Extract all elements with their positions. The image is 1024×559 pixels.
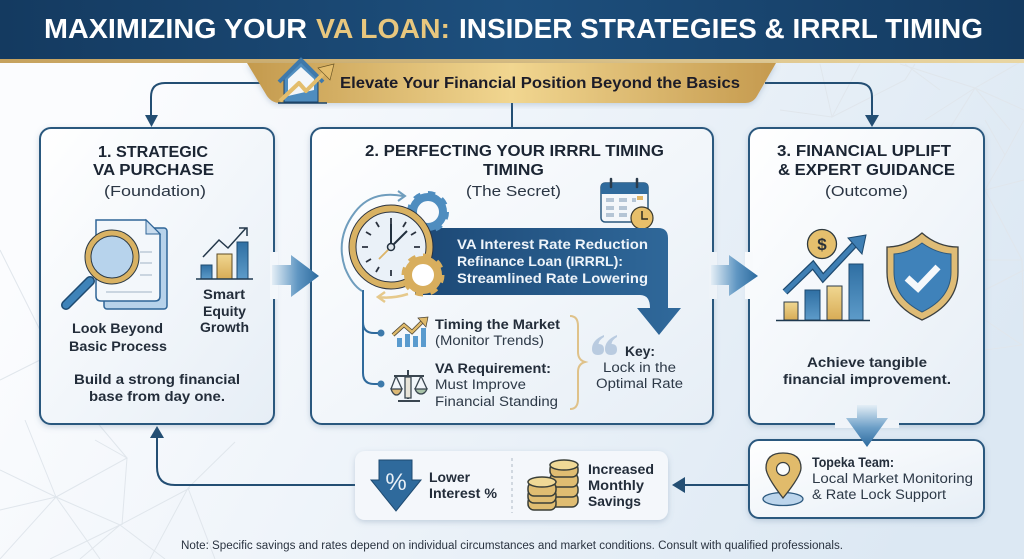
Topeka text: Local Market Monitoring [812, 471, 973, 486]
connector: ribbon to panel 3 [765, 83, 879, 127]
ribbon text: Elevate Your Financial Position Beyond the Basics [340, 75, 740, 92]
icon: quotation marks [592, 335, 617, 355]
panel 1 heading [93, 144, 214, 200]
label: smart equity growth [200, 287, 249, 335]
icon: growth chart with coin: $ [817, 235, 827, 254]
label: look beyond basic process: Look Beyond [72, 321, 163, 336]
panel 1 summary: base from day one. [89, 389, 225, 404]
Topeka text: Topeka Team: [812, 455, 894, 470]
text: monthly savings [588, 462, 654, 509]
text: monthly savings: Increased [588, 462, 654, 477]
icon: clock with gears [342, 191, 446, 302]
label: smart equity growth: Growth [200, 320, 249, 335]
banner arrow: IRRRL definition [415, 228, 681, 335]
icon: coin stacks [528, 460, 578, 510]
title: INSIDER STRATEGIES & IRRRL TIMING [459, 13, 983, 44]
connector: ribbon to panel 2 [511, 100, 513, 128]
arrow: panel 1 to panel 2 [270, 252, 319, 299]
text: VA requirement [435, 361, 558, 409]
text: lower interest [429, 470, 497, 501]
panel 1 heading: (Foundation) [104, 183, 206, 200]
text: lower interest: Interest % [429, 486, 497, 501]
panel 1 heading: VA PURCHASE [93, 162, 214, 179]
text: VA requirement: VA Requirement: [435, 361, 551, 376]
brace [570, 316, 585, 409]
icon: percent down arrow: % [385, 469, 407, 496]
label: look beyond basic process: Basic Process [69, 339, 167, 354]
label: smart equity growth: Equity [203, 304, 246, 319]
panel 1 heading: 1. STRATEGIC [98, 144, 208, 161]
icon: location pin [763, 453, 803, 506]
panel 2 heading: 2. PERFECTING YOUR IRRRL TIMING [365, 143, 664, 160]
title [44, 13, 983, 44]
panel 1 summary [74, 372, 240, 404]
panel 3: financial uplift [749, 128, 984, 424]
header band [0, 0, 1024, 63]
panel 2 heading [365, 143, 664, 200]
text: monthly savings: Monthly [588, 478, 645, 493]
text: VA requirement: Financial Standing [435, 394, 558, 409]
text: key takeaway: Lock in the [603, 360, 676, 375]
text: lower interest: Lower [429, 470, 471, 485]
icon: calendar [601, 179, 653, 229]
title: MAXIMIZING YOUR [44, 13, 307, 44]
panel 2 heading: (The Secret) [466, 183, 561, 200]
text: VA requirement: Must Improve [435, 377, 526, 392]
ribbon subtitle [247, 60, 776, 103]
icon: house with rising arrow [278, 60, 334, 103]
text: key takeaway [596, 344, 683, 391]
icon: growth chart with coin [776, 230, 870, 320]
panel 3 summary [783, 355, 951, 387]
panel 1: strategic VA purchase [40, 128, 274, 424]
panel 2: perfecting IRRRL timing [311, 128, 713, 424]
title: VA LOAN: [316, 13, 450, 44]
text: monthly savings: Savings [588, 494, 641, 509]
icon: document and magnifier [66, 220, 167, 309]
panel 3 summary: financial improvement. [783, 372, 951, 387]
icon: shield with check [887, 233, 958, 320]
panel: benefits [355, 451, 668, 520]
banner arrow: IRRRL definition: VA Interest Rate Reduction [457, 236, 648, 252]
text: key takeaway: Optimal Rate [596, 376, 683, 391]
label: smart equity growth: Smart [203, 287, 246, 302]
connector: benefits to panel 1 [150, 426, 356, 485]
panel 3 summary: Achieve tangible [807, 355, 928, 370]
panel 3 heading: (Outcome) [825, 183, 908, 200]
text: timing the market: (Monitor Trends) [435, 333, 544, 348]
icon: percent down arrow [371, 460, 421, 511]
icon: equity growth chart [196, 228, 253, 279]
connector: ribbon to panel 1 [145, 83, 262, 127]
banner arrow: IRRRL definition: Streamlined Rate Lowering [457, 270, 648, 286]
banner arrow: IRRRL definition: Refinance Loan (IRRRL): [457, 253, 623, 269]
Topeka text: & Rate Lock Support [812, 487, 946, 502]
text: timing the market: Timing the Market [435, 317, 561, 332]
Topeka text [812, 455, 973, 502]
arrow: panel 2 to panel 3 [709, 252, 758, 299]
panel 3 heading: & EXPERT GUIDANCE [778, 162, 955, 179]
footnote: Note: Specific savings and rates depend on individual circumstances and market conditions. Consult with qualified professionals. [181, 540, 843, 552]
panel 1 summary: Build a strong financial [74, 372, 240, 387]
panel: Topeka team [749, 440, 984, 518]
icon: market trend chart [393, 317, 428, 347]
panel 3 heading: 3. FINANCIAL UPLIFT [777, 143, 951, 160]
icon: scales [391, 370, 427, 401]
connector: Topeka to benefits [672, 477, 750, 493]
text: timing the market [435, 317, 561, 348]
panel 3 heading [777, 143, 955, 200]
label: look beyond basic process [69, 321, 167, 354]
arrow: panel 3 to Topeka [835, 405, 899, 447]
text: key takeaway: Key: [625, 344, 655, 359]
icon: timeline connector with bullets [363, 290, 384, 388]
panel 2 heading: TIMING [483, 162, 544, 179]
